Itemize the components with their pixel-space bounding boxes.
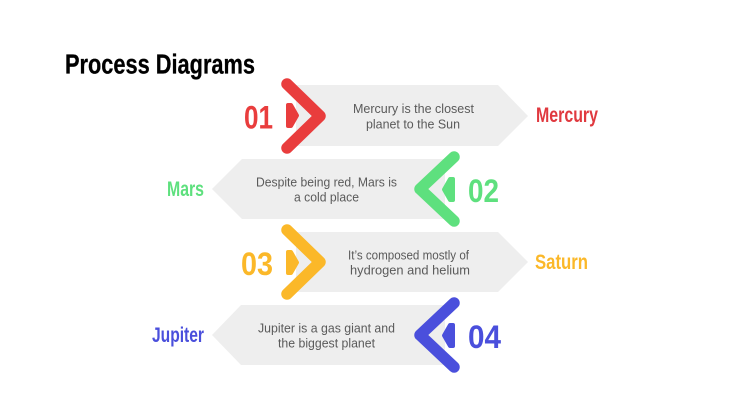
label: Mercury	[536, 104, 598, 127]
banner	[212, 305, 445, 365]
banner	[296, 232, 528, 292]
number: 02	[468, 173, 499, 209]
number: 04	[468, 319, 501, 355]
banner	[296, 85, 528, 146]
chevron icon	[287, 230, 320, 294]
step 2: Mars	[167, 157, 499, 221]
description: Jupiter is a gas giant and	[258, 320, 395, 336]
description	[258, 320, 395, 350]
description: Despite being red, Mars is	[256, 174, 397, 190]
label: Jupiter	[152, 324, 204, 347]
step 3: Saturn	[241, 230, 588, 294]
description: hydrogen and helium	[350, 262, 470, 278]
chevron icon	[420, 303, 454, 367]
number: 03	[241, 246, 273, 282]
title: Process Diagrams	[65, 48, 255, 80]
chevron icon	[420, 157, 454, 221]
label: Saturn	[535, 251, 588, 274]
label: Mars	[167, 178, 204, 201]
description	[348, 248, 470, 278]
banner	[212, 159, 445, 219]
description: planet to the Sun	[366, 116, 460, 132]
step 4: Jupiter	[152, 303, 501, 367]
description: It’s composed mostly of	[348, 248, 469, 262]
description: Mercury is the closest	[353, 101, 474, 116]
description	[353, 101, 474, 132]
step 1: Mercury	[244, 84, 598, 148]
description: the biggest planet	[278, 336, 375, 350]
description: a cold place	[294, 190, 359, 204]
number: 01	[244, 100, 273, 136]
description	[256, 174, 397, 204]
chevron icon	[287, 84, 320, 148]
